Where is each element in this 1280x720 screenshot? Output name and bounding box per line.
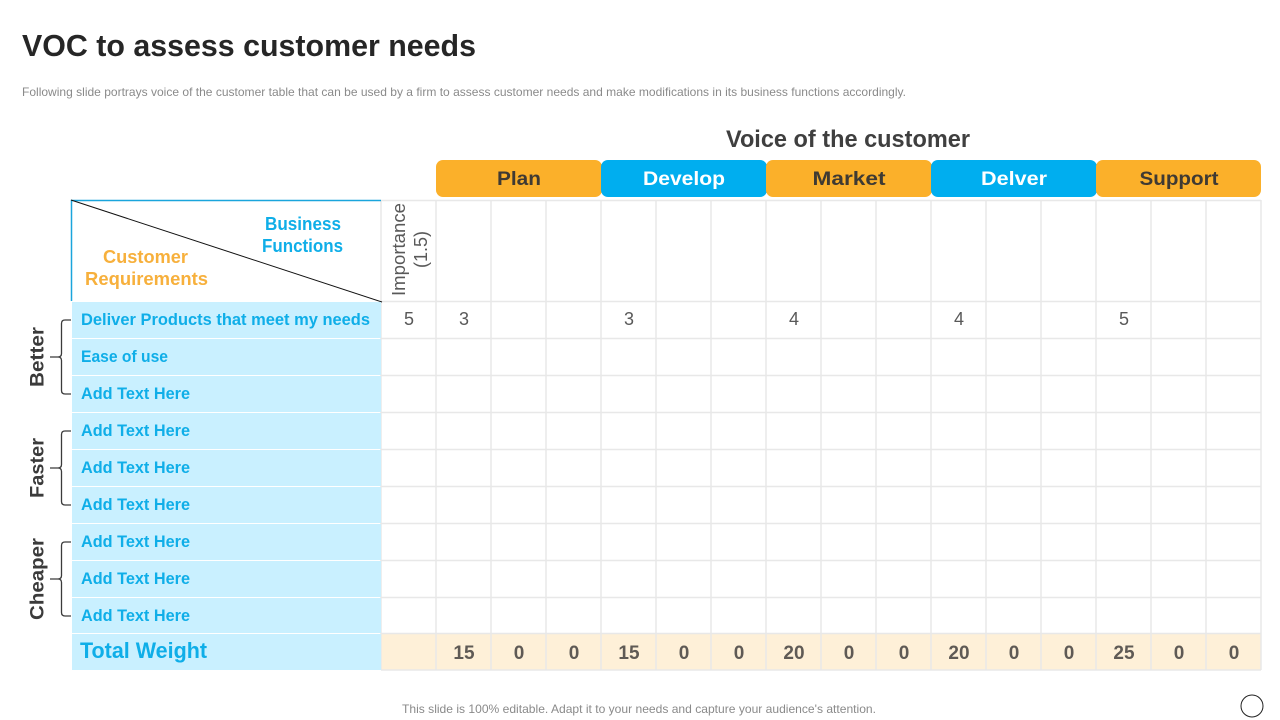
title: VOC to assess customer needs xyxy=(22,28,476,63)
group: faster xyxy=(28,431,71,505)
total weight values: 0 xyxy=(514,643,524,664)
pill: plan xyxy=(436,160,602,197)
pill: market xyxy=(766,160,932,197)
total weight values: 0 xyxy=(1009,643,1019,664)
heading: voice of the customer: Voice of the customer xyxy=(726,126,970,153)
total weight values: 0 xyxy=(1229,643,1239,664)
total weight values: 15 xyxy=(618,643,640,664)
total weight row background xyxy=(381,633,1261,670)
pill: develop: Develop xyxy=(643,169,725,190)
header pills: business functions xyxy=(436,160,1261,197)
pill: market: Market xyxy=(812,169,886,190)
label: customer requirements: Requirements xyxy=(85,269,208,289)
total weight values: 0 xyxy=(569,643,579,664)
customer requirements rows: Add Text Here xyxy=(81,384,190,403)
group: better: Better xyxy=(28,326,48,387)
customer requirements rows: Add Text Here xyxy=(81,421,190,440)
pill: support: Support xyxy=(1140,169,1219,190)
total weight values: 20 xyxy=(783,643,805,664)
first row scores xyxy=(404,309,1129,329)
customer requirements rows: Add Text Here xyxy=(81,458,190,477)
label: customer requirements: Customer xyxy=(103,247,188,267)
total weight values: 20 xyxy=(948,643,970,664)
diagonal header cell xyxy=(71,200,382,302)
group: better xyxy=(28,320,71,394)
label: business functions: Business xyxy=(265,214,341,234)
footer note: This slide is 100% editable. Adapt it to your needs and capture your audience's attention. xyxy=(402,702,876,716)
first row scores: 5 xyxy=(404,309,414,329)
icon: circle xyxy=(1241,695,1263,717)
total weight values xyxy=(453,643,1239,664)
label: business functions: Functions xyxy=(262,236,343,256)
importance column header: Importance xyxy=(389,203,409,296)
first row scores: 3 xyxy=(459,309,469,329)
matrix grid xyxy=(381,200,1261,670)
total weight values: 0 xyxy=(844,643,854,664)
first row scores: 4 xyxy=(789,309,799,329)
subtitle text: Following slide portrays voice of the customer table that can be used by a firm to assess customer needs and make modifications in its business functions accordingly. xyxy=(22,85,906,99)
customer requirements rows: Add Text Here xyxy=(81,569,190,588)
total weight values: 0 xyxy=(679,643,689,664)
pill: delver: Delver xyxy=(981,169,1048,190)
total weight values: 15 xyxy=(453,643,475,664)
pill: support xyxy=(1096,160,1261,197)
pill: plan: Plan xyxy=(497,169,541,190)
pill: delver xyxy=(931,160,1097,197)
first row scores: 5 xyxy=(1119,309,1129,329)
total weight values: 25 xyxy=(1113,643,1135,664)
group: cheaper: Cheaper xyxy=(28,537,48,620)
label: total weight: Total Weight xyxy=(80,638,208,663)
first row scores: 3 xyxy=(624,309,634,329)
importance column header: (1.5) xyxy=(411,231,431,268)
customer requirements rows: Add Text Here xyxy=(81,495,190,514)
total weight values: 0 xyxy=(734,643,744,664)
customer requirements rows: Add Text Here xyxy=(81,606,190,625)
customer requirements rows: Deliver Products that meet my needs xyxy=(81,310,370,329)
first row scores: 4 xyxy=(954,309,964,329)
group: faster: Faster xyxy=(28,437,48,498)
customer requirements rows xyxy=(72,302,381,670)
total weight values: 0 xyxy=(1064,643,1074,664)
total weight values: 0 xyxy=(899,643,909,664)
group: cheaper xyxy=(28,537,71,620)
customer requirements rows: Ease of use xyxy=(81,347,168,366)
pill: develop xyxy=(601,160,767,197)
total weight values: 0 xyxy=(1174,643,1184,664)
customer requirements rows: Add Text Here xyxy=(81,532,190,551)
